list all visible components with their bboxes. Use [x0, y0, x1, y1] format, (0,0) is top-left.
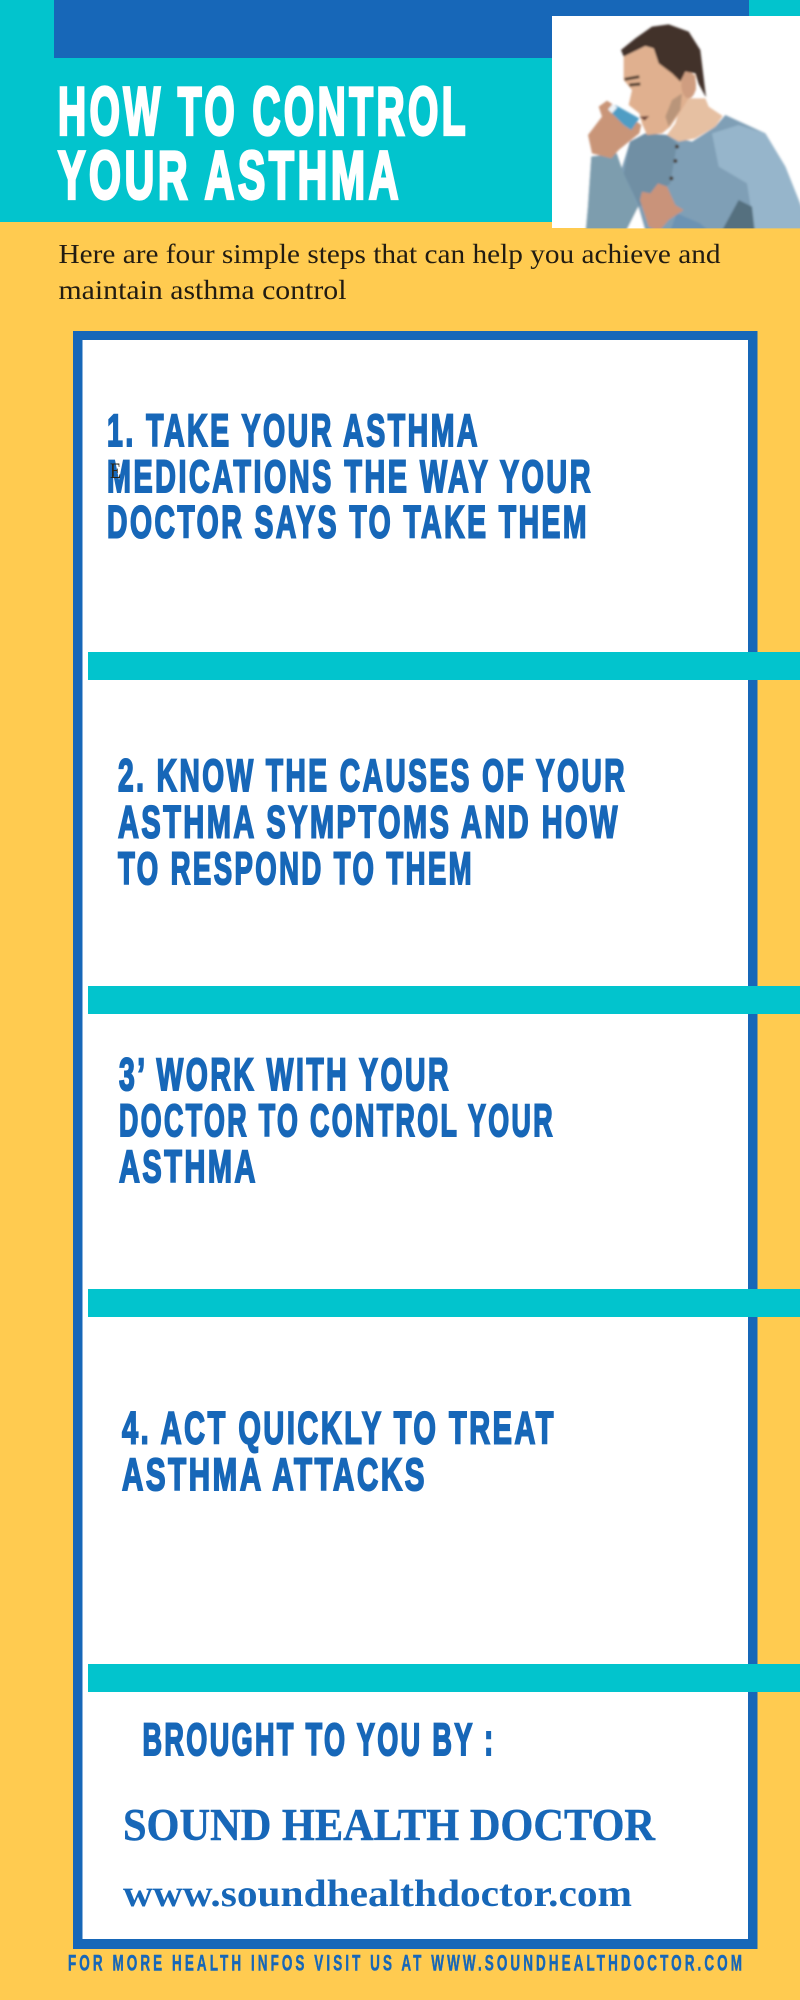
- divider bar 4: [88, 1664, 800, 1692]
- title: [58, 74, 469, 214]
- panel: steps frame: [73, 331, 758, 1949]
- hand on chest: [640, 183, 684, 232]
- neck: [667, 98, 723, 142]
- step 1 heading: 1. TAKE YOUR ASTHMA: [107, 405, 480, 456]
- step 4 heading: [122, 1402, 556, 1500]
- hand holding inhaler: [588, 101, 641, 158]
- website: www.soundhealthdoctor.com: [123, 1873, 632, 1915]
- organisation name: SOUND HEALTH DOCTOR: [123, 1799, 656, 1850]
- step 3 heading: ASTHMA: [119, 1141, 258, 1192]
- intro text: [58, 239, 721, 305]
- intro text: Here are four simple steps that can help you achieve and: [58, 239, 721, 269]
- step 3 heading: 3’ WORK WITH YOUR: [119, 1049, 451, 1100]
- photo: man using an inhaler: [552, 16, 800, 237]
- title: YOUR ASTHMA: [58, 138, 402, 214]
- divider bar 2: [88, 986, 800, 1014]
- title: HOW TO CONTROL: [58, 74, 469, 150]
- step 2 heading: TO RESPOND TO THEM: [118, 843, 474, 894]
- face: [624, 46, 696, 135]
- divider bar 1: [88, 652, 800, 680]
- stray letter E: E: [110, 458, 121, 483]
- credit heading: BROUGHT TO YOU BY :: [142, 1714, 496, 1765]
- step 4 heading: ASTHMA ATTACKS: [122, 1449, 427, 1500]
- shirt: [620, 114, 764, 228]
- intro text: maintain asthma control: [58, 275, 346, 305]
- step 3 heading: [119, 1049, 555, 1192]
- hair: [621, 24, 706, 97]
- step 2 heading: [118, 750, 627, 894]
- header band: [0, 0, 800, 222]
- divider bar 3: [88, 1289, 800, 1317]
- step 4 heading: 4. ACT QUICKLY TO TREAT: [122, 1402, 556, 1454]
- step 1 heading: [107, 405, 593, 548]
